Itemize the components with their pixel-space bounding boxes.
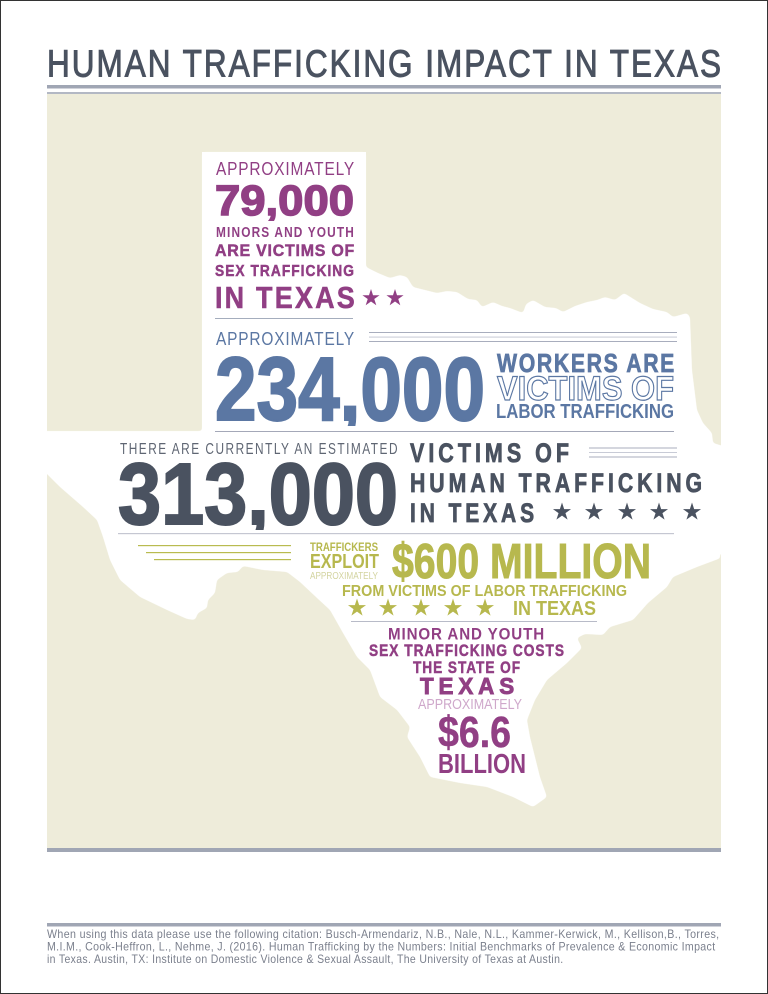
text: minor and youth: MINOR AND YOUTH <box>388 624 545 644</box>
panel: labor trafficking statistic <box>216 332 674 426</box>
text: victims of: VICTIMS OF <box>410 438 573 468</box>
text: from victims of labor trafficking: FROM VICTIMS OF LABOR TRAFFICKING <box>342 583 627 600</box>
text: minors and youth: MINORS AND YOUTH <box>216 225 355 241</box>
panel: labor trafficking profits <box>310 535 651 620</box>
text: sex trafficking: SEX TRAFFICKING <box>215 263 355 280</box>
number: 234,000: 234,000 <box>215 340 485 440</box>
icon: five stars <box>348 598 494 616</box>
citation: in Texas. Austin, TX: Institute on Domestic Violence & Sexual Assault, The University of Texas at Austin. <box>47 952 564 966</box>
icon: five stars <box>553 502 701 520</box>
text: exploit: EXPLOIT <box>310 551 379 573</box>
icon: two stars <box>362 289 404 305</box>
number: $600 million: $600 MILLION <box>392 535 651 589</box>
text: in Texas: IN TEXAS <box>410 498 538 528</box>
label: approximately: APPROXIMATELY <box>216 158 355 179</box>
text: billion: BILLION <box>438 748 526 779</box>
text: traffickers: TRAFFICKERS <box>310 542 378 554</box>
text: Texas: TEXAS <box>420 673 519 699</box>
text: sex trafficking costs: SEX TRAFFICKING COSTS <box>369 642 565 660</box>
text: the state of: THE STATE OF <box>413 658 521 677</box>
label: approximately: APPROXIMATELY <box>418 696 522 713</box>
text: in Texas: IN TEXAS <box>513 598 596 620</box>
text: workers are: WORKERS ARE <box>497 348 676 378</box>
panel: sex trafficking cost <box>369 624 565 779</box>
panel: Texas map background <box>35 94 733 848</box>
panel: total victims statistic <box>118 442 702 530</box>
number: $6.6: $6.6 <box>438 708 511 757</box>
text: victims of outlined: VICTIMS OF <box>497 370 674 408</box>
map: Texas silhouette <box>38 152 730 807</box>
text: labor trafficking: LABOR TRAFFICKING <box>496 401 674 423</box>
text: are victims of: ARE VICTIMS OF <box>215 241 355 260</box>
number: 313,000: 313,000 <box>118 446 398 543</box>
label: approximately: APPROXIMATELY <box>216 328 355 349</box>
text: in Texas: IN TEXAS <box>215 280 357 315</box>
label: approximately: APPROXIMATELY <box>310 570 378 582</box>
number: 79,000: 79,000 <box>215 177 354 225</box>
citation <box>47 927 720 966</box>
panel: minors and youth statistic <box>215 158 404 315</box>
label: there are currently an estimated: THERE ARE CURRENTLY AN ESTIMATED <box>120 441 399 458</box>
